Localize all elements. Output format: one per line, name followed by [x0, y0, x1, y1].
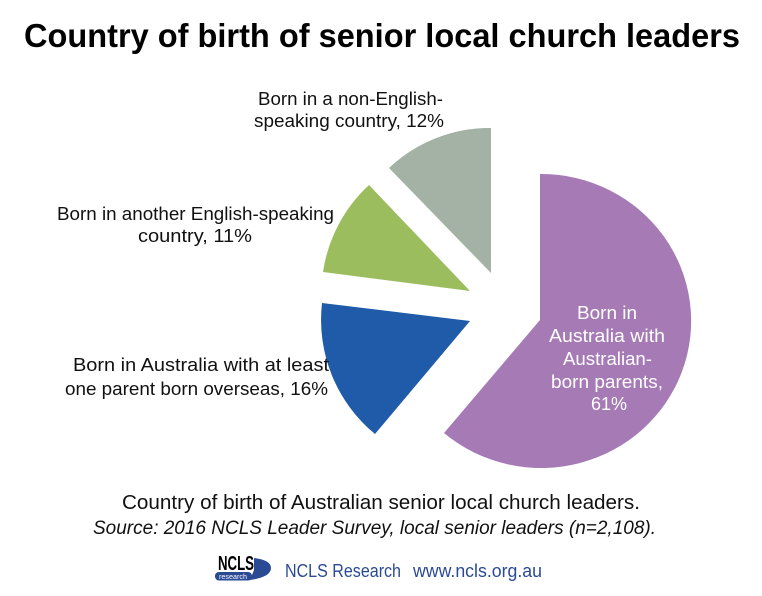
- slice: born in a non-English-speaking country 12%: [389, 128, 491, 273]
- label: another English-speaking: [57, 203, 334, 246]
- label: Australian-born parents: 61%: [591, 393, 627, 414]
- label: Australian-born parents: born parents,: [551, 371, 663, 392]
- footer: website: www.ncls.org.au: [412, 561, 542, 581]
- label: Australian-born parents: Born in: [577, 302, 637, 323]
- label: another English-speaking: Born in another English-speaking: [57, 203, 334, 224]
- slice: born in Australia with Australian-born parents 61%: [444, 174, 691, 468]
- label: non-English-speaking: Born in a non-English-: [258, 88, 443, 109]
- label: Australian-born parents: [549, 302, 665, 414]
- pie chart: [321, 128, 691, 468]
- label: Australia with overseas parent: one parent born overseas, 16%: [65, 378, 328, 399]
- label: Australian-born parents: Australia with: [549, 325, 665, 346]
- label: Australian-born parents: Australian-: [563, 348, 652, 369]
- footer: organisation name: NCLS Research: [285, 561, 401, 581]
- source note: Source: 2016 NCLS Leader Survey, local senior leaders (n=2,108).: [93, 517, 656, 539]
- logo: NCLS research: NCLS: [218, 553, 254, 575]
- slice: born in another English-speaking country 11%: [323, 185, 470, 291]
- label: Australia with overseas parent: [65, 354, 329, 399]
- label: another English-speaking: country, 11%: [138, 225, 252, 246]
- label: non-English-speaking: speaking country, 12%: [254, 110, 444, 131]
- label: non-English-speaking: [254, 88, 444, 131]
- label: Australia with overseas parent: Born in Australia with at least: [73, 354, 329, 375]
- logo: NCLS research: research: [219, 574, 247, 581]
- title: Country of birth of senior local church leaders: [24, 17, 740, 54]
- slice: born in Australia with overseas parent 16%: [321, 303, 470, 434]
- caption: Country of birth of Australian senior local church leaders.: [122, 492, 640, 514]
